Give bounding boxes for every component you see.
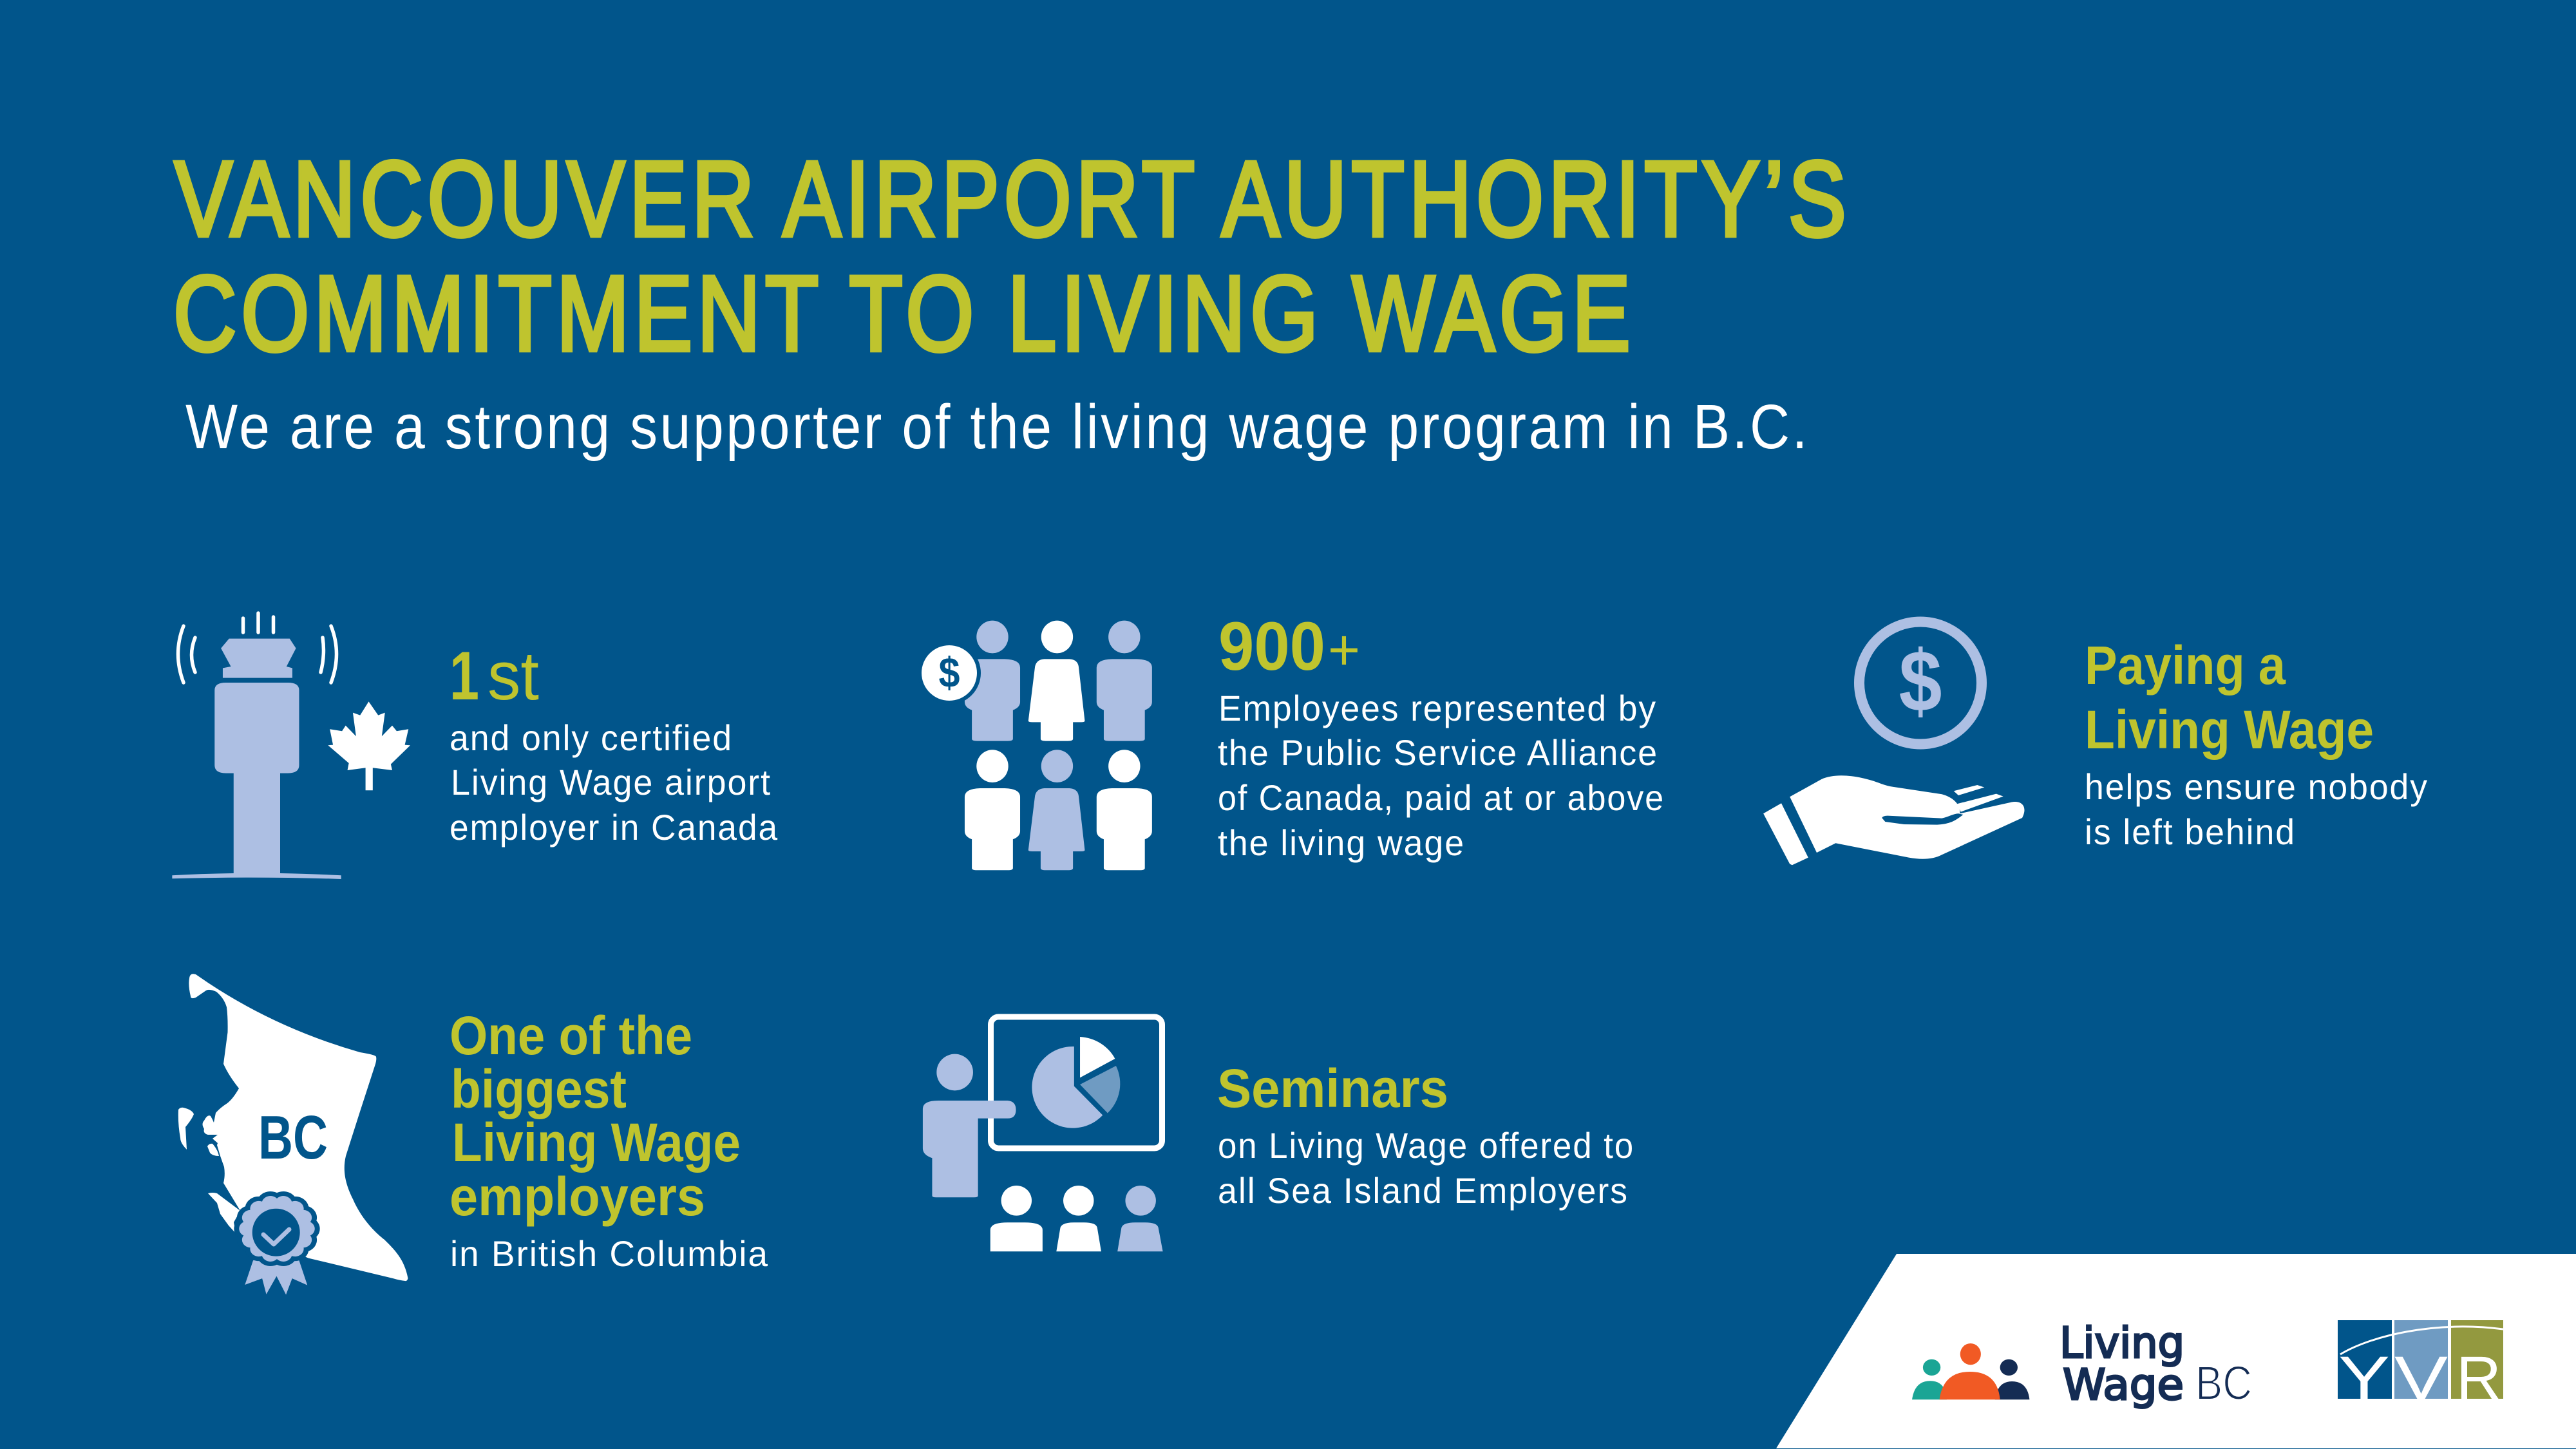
logo: YVR bbox=[2338, 1320, 2503, 1412]
text: employees description bbox=[1218, 688, 1665, 863]
heading: one of the biggest bbox=[450, 1005, 741, 1227]
icon: dollar coin: $ bbox=[1899, 632, 1942, 730]
icon: British Columbia map with rosette bbox=[178, 974, 408, 1294]
stat: 1st: 1 bbox=[450, 637, 479, 714]
text: paying description: helps ensure nobody bbox=[2085, 766, 2429, 807]
icon: dollar coin bbox=[1859, 622, 1982, 744]
icon: maple leaf bbox=[328, 701, 410, 790]
heading: paying a living wage: Paying a bbox=[2085, 635, 2286, 696]
icon: people with dollar coin bbox=[918, 621, 1152, 870]
stat: 1st bbox=[450, 637, 539, 714]
heading: one of the biggest: biggest bbox=[451, 1059, 627, 1119]
panel: seminars bbox=[923, 1017, 1634, 1251]
title: COMMITMENT TO LIVING WAGE bbox=[173, 254, 1635, 374]
text: paying description bbox=[2085, 766, 2429, 852]
panel: first certified airport bbox=[172, 613, 779, 879]
icon: presenter with pie chart and audience bbox=[923, 1017, 1163, 1251]
panel: biggest employers in BC bbox=[178, 974, 769, 1294]
logo: Living Wage BC: Wage bbox=[2063, 1360, 2184, 1410]
icon: rosette badge bbox=[239, 1196, 315, 1294]
stat: 1st: st bbox=[488, 637, 539, 714]
stat: 900+: + bbox=[1328, 618, 1360, 683]
text: employees description: the living wage bbox=[1218, 822, 1465, 863]
logo: Living Wage BC: BC bbox=[2195, 1356, 2252, 1410]
icon: people with dollar coin: $ bbox=[939, 649, 960, 696]
logo: Living Wage BC: Living bbox=[2060, 1318, 2184, 1368]
heading: paying a living wage bbox=[2085, 635, 2374, 760]
text: employees description: the Public Service Alliance bbox=[1218, 732, 1658, 773]
title bbox=[173, 140, 1851, 374]
icon: British Columbia map with rosette: BC bbox=[258, 1103, 328, 1172]
text: seminars description: all Sea Island Employers bbox=[1218, 1170, 1629, 1211]
text: first certified description: and only certified bbox=[450, 717, 733, 758]
text: first certified description: employer in Canada bbox=[450, 807, 779, 848]
heading: one of the biggest: employers bbox=[450, 1166, 705, 1227]
heading: paying a living wage: Living Wage bbox=[2085, 699, 2374, 760]
text: employees description: of Canada, paid at or above bbox=[1218, 777, 1665, 818]
text: seminars description bbox=[1218, 1125, 1634, 1211]
panel: 900+ employees bbox=[918, 607, 1665, 870]
text: employees description: Employees represented by bbox=[1218, 688, 1657, 728]
subtitle: We are a strong supporter of the living wage program in B.C. bbox=[185, 392, 1810, 462]
logo: YVR: V bbox=[2394, 1344, 2448, 1412]
stat: 900+: 900 bbox=[1218, 607, 1325, 685]
text: seminars description: on Living Wage offered to bbox=[1218, 1125, 1634, 1166]
text: in British Columbia: in British Columbia bbox=[450, 1233, 769, 1274]
text: paying description: is left behind bbox=[2085, 811, 2296, 852]
logo: YVR: R bbox=[2456, 1344, 2501, 1412]
logo: Living Wage BC bbox=[1912, 1318, 2252, 1410]
icon: open hand bbox=[1763, 775, 2024, 865]
title: VANCOUVER AIRPORT AUTHORITY’S bbox=[175, 140, 1851, 259]
panel: logo band bbox=[1776, 1254, 2576, 1448]
text: first certified description bbox=[450, 717, 779, 848]
text: first certified description: Living Wage airport bbox=[451, 762, 772, 802]
panel: paying a living wage bbox=[1763, 622, 2429, 865]
heading: seminars: Seminars bbox=[1217, 1058, 1448, 1119]
heading: one of the biggest: One of the bbox=[450, 1005, 692, 1066]
icon: control tower bbox=[172, 613, 341, 879]
logo: YVR: Y bbox=[2338, 1344, 2390, 1412]
heading: one of the biggest: Living Wage bbox=[452, 1112, 741, 1173]
